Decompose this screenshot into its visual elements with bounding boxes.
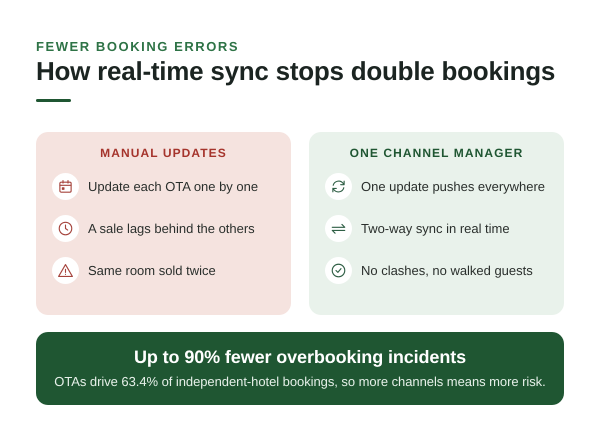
icon: sync: [325, 173, 352, 200]
icon: warning: [52, 257, 79, 284]
title accent bar: [36, 99, 71, 102]
text: sale lags: A sale lags behind the others: [88, 221, 255, 236]
icon: calendar: [52, 173, 79, 200]
callout banner: [36, 332, 564, 405]
text: same room: Same room sold twice: [88, 263, 216, 278]
text: no clashes: No clashes, no walked guests: [361, 263, 533, 278]
text: two-way sync: Two-way sync in real time: [361, 221, 510, 236]
callout text: OTAs drive 63.4% of independent-hotel bookings, so more channels means more risk.: [54, 374, 546, 389]
text: one update: One update pushes everywhere: [361, 179, 545, 194]
heading: manual updates: MANUAL UPDATES: [100, 146, 227, 160]
text: update each OTA: Update each OTA one by one: [88, 179, 258, 194]
icon: check circle: [325, 257, 352, 284]
panel: manual updates: [36, 132, 291, 315]
panel: one channel manager: [309, 132, 564, 315]
heading: one channel manager: ONE CHANNEL MANAGER: [350, 146, 523, 160]
callout heading: Up to 90% fewer overbooking incidents: [134, 347, 466, 367]
icon: clock: [52, 215, 79, 242]
eyebrow: FEWER BOOKING ERRORS: [36, 38, 239, 54]
icon: two-way arrows: [325, 215, 352, 242]
title: How real-time sync stops double bookings: [36, 56, 555, 86]
